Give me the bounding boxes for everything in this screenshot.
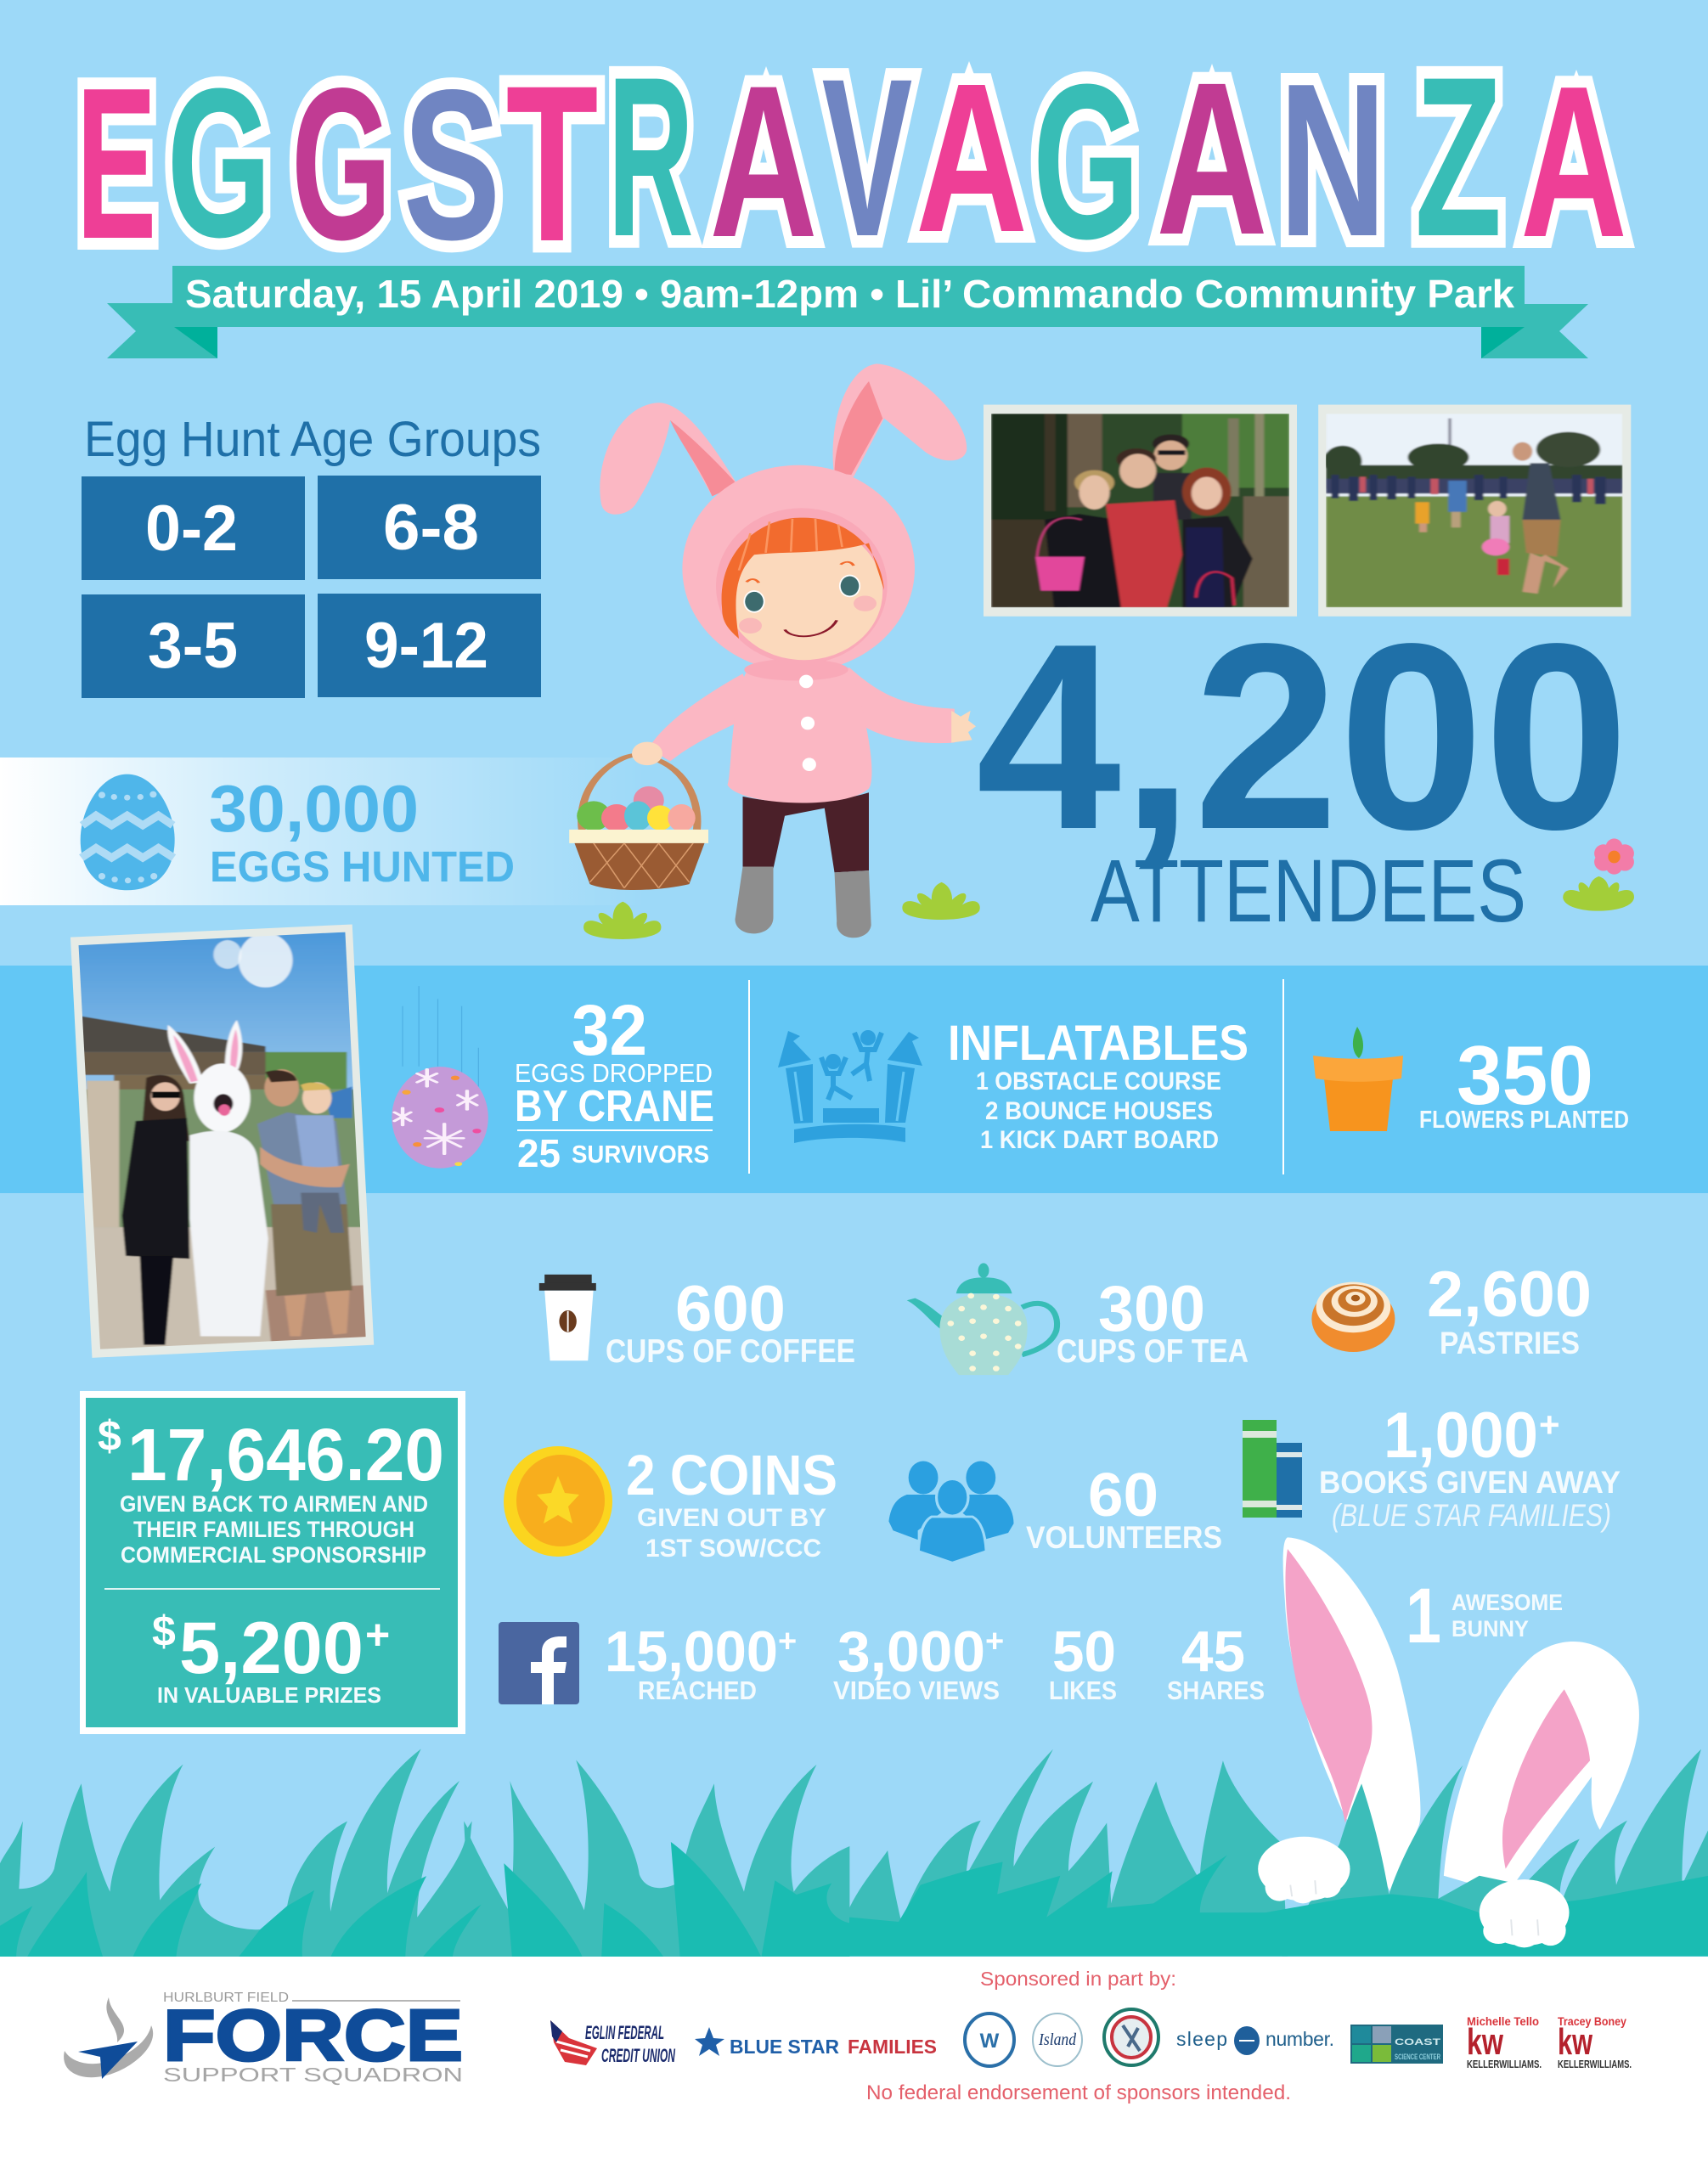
heading: egg hunt age groups: Egg Hunt Age Groups bbox=[84, 412, 541, 467]
stat: 1 awesome bunny: 1 bbox=[1406, 1573, 1441, 1659]
icon: flower and grass tuft bbox=[1563, 838, 1634, 911]
logo: Emerald Coast Science Center bbox=[1350, 2025, 1443, 2064]
stat: facebook reach figures bbox=[605, 1619, 1265, 1705]
logo: Keller Williams, Tracey Boney: Tracey Boney bbox=[1558, 2014, 1626, 2028]
divider left bbox=[748, 980, 750, 1174]
title: Eggstravaganza bbox=[76, 30, 1627, 288]
stat: 1,000+ books given away: BOOKS GIVEN AWAY bbox=[1319, 1465, 1621, 1500]
stat: facebook reach figures: LIKES bbox=[1049, 1676, 1117, 1705]
icon: cinnamon roll bbox=[1311, 1282, 1395, 1352]
logo: Keller Williams, Tracey Boney: kw bbox=[1558, 2021, 1593, 2063]
logo: Sleep Number: number. bbox=[1265, 2028, 1334, 2050]
icon: bounce house bbox=[778, 1030, 922, 1143]
photo: four children with baskets bbox=[984, 405, 1297, 617]
sponsor heading: Sponsored in part by: bbox=[980, 1968, 1176, 1990]
stat: 1 awesome bunny: AWESOME bbox=[1452, 1590, 1563, 1615]
panel: money given back: COMMERCIAL SPONSORSHIP bbox=[121, 1542, 426, 1568]
icon: flower pot bbox=[1313, 1027, 1403, 1131]
stat: 2 coins given out: GIVEN OUT BY bbox=[637, 1504, 826, 1532]
stat: 2 coins given out: 1ST SOW/CCC bbox=[645, 1535, 821, 1563]
stat: 350 flowers planted bbox=[1419, 1028, 1629, 1134]
logo: Blue Star Families: FAMILIES bbox=[848, 2036, 937, 2058]
stat: 32 eggs dropped by crane, 25 survivors bbox=[515, 990, 714, 1175]
panel: money given back bbox=[80, 1391, 465, 1734]
logo: Hurlburt Field Force Support Squadron: SUPPORT SQUADRON bbox=[163, 2064, 463, 2086]
stat: facebook reach figures: + bbox=[985, 1624, 1004, 1659]
fading white band behind eggs hunted bbox=[0, 758, 645, 905]
logo: Eglin Federal Credit Union: CREDIT UNION bbox=[601, 2045, 676, 2066]
title: Eggstravaganza: A bbox=[1520, 42, 1627, 283]
icon: falling decorated egg bbox=[392, 986, 488, 1169]
icon: facebook bbox=[499, 1622, 579, 1704]
stat: 60 volunteers bbox=[1026, 1462, 1222, 1555]
logo: Blue Star Families: BLUE STAR bbox=[730, 2036, 839, 2058]
stat: facebook reach figures: 50 bbox=[1052, 1619, 1116, 1684]
stat: 300 cups of tea: CUPS OF TEA bbox=[1057, 1333, 1249, 1370]
logo: round sponsor seals bbox=[965, 2009, 1158, 2066]
icon: stacked books bbox=[1243, 1420, 1302, 1518]
logo: Keller Williams, Michelle Tello: KELLERWILLIAMS. bbox=[1467, 2058, 1542, 2070]
stat: 32 eggs dropped by crane, 25 survivors: BY CRANE bbox=[515, 1082, 714, 1131]
stat: 1,000+ books given away: + bbox=[1539, 1405, 1560, 1445]
logo: Sleep Number: sleep bbox=[1176, 2028, 1227, 2050]
title: Eggstravaganza: G bbox=[167, 45, 271, 282]
stat: 30,000 eggs hunted: 30,000 bbox=[209, 771, 419, 846]
panel: money given back: 17,646.20 bbox=[127, 1414, 444, 1496]
stat: facebook reach figures: REACHED bbox=[638, 1676, 757, 1705]
panel: money given back: THEIR FAMILIES THROUGH bbox=[133, 1517, 414, 1542]
title: Eggstravaganza: T bbox=[506, 40, 598, 288]
stat: 4,200 attendees: ATTENDEES bbox=[1091, 842, 1526, 941]
divider right bbox=[1282, 979, 1284, 1174]
icon: volunteers group bbox=[888, 1461, 1014, 1563]
stat: 2,600 pastries: PASTRIES bbox=[1440, 1326, 1580, 1360]
title: Eggstravaganza: A bbox=[709, 42, 818, 283]
stat: 2 coins given out bbox=[626, 1444, 837, 1563]
logo: Keller Williams, Tracey Boney: KELLERWILLIAMS. bbox=[1558, 2058, 1632, 2070]
ribbon banner: date, time and place: Saturday, 15 April 2019 • 9am-12pm • Lil’ Commando Community Park bbox=[185, 272, 1514, 316]
stat: inflatables list: 1 KICK DART BOARD bbox=[980, 1126, 1219, 1154]
logo: Keller Williams, Michelle Tello: Michelle Tello bbox=[1467, 2014, 1539, 2028]
icon: gold coin with star bbox=[504, 1446, 612, 1557]
stat: 32 eggs dropped by crane, 25 survivors: 32 bbox=[572, 990, 647, 1070]
stat: 1 awesome bunny: BUNNY bbox=[1452, 1616, 1529, 1642]
stat: 600 cups of coffee bbox=[606, 1273, 855, 1370]
stat: 60 volunteers: 60 bbox=[1088, 1462, 1158, 1529]
stat: inflatables list: INFLATABLES bbox=[948, 1016, 1249, 1071]
age group boxes bbox=[82, 476, 541, 698]
stat: 350 flowers planted: FLOWERS PLANTED bbox=[1419, 1107, 1629, 1134]
stat: 350 flowers planted: 350 bbox=[1457, 1028, 1593, 1122]
stat: 600 cups of coffee: CUPS OF COFFEE bbox=[606, 1333, 855, 1370]
logo: Sleep Number bbox=[1176, 2026, 1334, 2055]
panel: money given back: IN VALUABLE PRIZES bbox=[157, 1682, 381, 1708]
logo: Blue Star Families bbox=[695, 2027, 937, 2058]
icon: coffee cup bbox=[539, 1275, 596, 1360]
stat: facebook reach figures: VIDEO VIEWS bbox=[833, 1676, 1000, 1705]
illustration: child in bunny suit with basket bbox=[569, 363, 980, 939]
title: Eggstravaganza: A bbox=[1156, 37, 1268, 280]
stat: 1 awesome bunny bbox=[1406, 1573, 1563, 1659]
stat: 4,200 attendees: 4,200 bbox=[976, 589, 1629, 885]
logo: Hurlburt Field Force Support Squadron bbox=[64, 1991, 463, 2086]
title: Eggstravaganza: Z bbox=[1415, 31, 1502, 284]
logo: Keller Williams, Michelle Tello bbox=[1467, 2014, 1542, 2070]
footer background bbox=[0, 1957, 1708, 2174]
stat: 30,000 eggs hunted: EGGS HUNTED bbox=[210, 842, 515, 891]
stat: 60 volunteers: VOLUNTEERS bbox=[1026, 1520, 1222, 1555]
stat: inflatables list bbox=[948, 1016, 1249, 1154]
logo: Hurlburt Field Force Support Squadron: HURLBURT FIELD bbox=[163, 1991, 289, 2005]
grass right bbox=[849, 1749, 1708, 1957]
title: Eggstravaganza: E bbox=[76, 42, 156, 284]
stat: 2 coins given out: 2 COINS bbox=[626, 1444, 837, 1507]
panel: money given back: $ bbox=[152, 1608, 176, 1655]
stat: inflatables list: 1 OBSTACLE COURSE bbox=[976, 1067, 1221, 1095]
disclaimer: No federal endorsement of sponsors intended. bbox=[866, 2081, 1291, 2104]
stat: 2,600 pastries: 2,600 bbox=[1427, 1259, 1592, 1331]
stat: facebook reach figures: SHARES bbox=[1167, 1676, 1265, 1705]
title: Eggstravaganza: A bbox=[916, 40, 1028, 277]
illustration: bunny paws bbox=[1258, 1837, 1570, 1947]
logo: Hurlburt Field Force Support Squadron: FORCE bbox=[163, 1996, 463, 2076]
stat: 1,000+ books given away bbox=[1319, 1400, 1621, 1533]
logo: Eglin Federal Credit Union bbox=[550, 2020, 676, 2066]
logo: round sponsor seals: Island bbox=[1038, 2030, 1077, 2049]
ribbon banner: date, time and place bbox=[107, 266, 1588, 358]
stat: inflatables list: 2 BOUNCE HOUSES bbox=[985, 1097, 1213, 1125]
logo: Keller Williams, Tracey Boney bbox=[1558, 2014, 1632, 2070]
age group boxes: 6-8 bbox=[383, 492, 479, 564]
age group boxes: 3-5 bbox=[148, 610, 238, 682]
stat: 1,000+ books given away: 1,000 bbox=[1384, 1400, 1538, 1472]
stat: 300 cups of tea: 300 bbox=[1098, 1273, 1205, 1345]
photo: family with the Easter bunny bbox=[70, 924, 374, 1358]
stat: facebook reach figures: 3,000 bbox=[837, 1619, 985, 1684]
stat: facebook reach figures: 45 bbox=[1181, 1619, 1245, 1684]
title: Eggstravaganza: S bbox=[403, 45, 500, 284]
stat: 32 eggs dropped by crane, 25 survivors: EGGS DROPPED bbox=[515, 1058, 713, 1088]
icon: blue decorated egg bbox=[81, 774, 175, 890]
stat: facebook reach figures: 15,000 bbox=[605, 1619, 778, 1684]
age group boxes: 9-12 bbox=[364, 610, 488, 682]
panel: money given back: $ bbox=[98, 1412, 121, 1460]
panel: money given back: + bbox=[365, 1611, 390, 1659]
grass left bbox=[0, 1749, 849, 1957]
stat: 600 cups of coffee: 600 bbox=[675, 1273, 786, 1345]
title: Eggstravaganza: V bbox=[822, 33, 912, 284]
logo: round sponsor seals: W bbox=[980, 2030, 1000, 2053]
logo: Emerald Coast Science Center: SCIENCE CENTER bbox=[1395, 2053, 1440, 2061]
logo: Eglin Federal Credit Union: EGLIN FEDERAL bbox=[585, 2022, 664, 2043]
photo: crowd hunting eggs on a field bbox=[1318, 405, 1631, 617]
logo: Emerald Coast Science Center: COAST bbox=[1395, 2037, 1440, 2047]
activities band bbox=[0, 966, 1708, 1193]
illustration: big bunny ears bbox=[1283, 1537, 1639, 1894]
stat: 2,600 pastries bbox=[1427, 1259, 1592, 1360]
panel: money given back: 5,200 bbox=[179, 1608, 364, 1689]
stat: 1,000+ books given away: (BLUE STAR FAMILIES) bbox=[1332, 1498, 1611, 1533]
stat: 32 eggs dropped by crane, 25 survivors: 25 bbox=[517, 1131, 561, 1175]
stat: 300 cups of tea bbox=[1057, 1273, 1249, 1370]
panel: money given back: GIVEN BACK TO AIRMEN AND bbox=[120, 1491, 428, 1517]
title: Eggstravaganza: G bbox=[291, 43, 392, 285]
stat: 30,000 eggs hunted bbox=[209, 771, 515, 891]
title: Eggstravaganza: N bbox=[1279, 37, 1386, 282]
stat: facebook reach figures: + bbox=[778, 1624, 797, 1659]
icon: polka dot teapot bbox=[907, 1263, 1057, 1375]
stat: 32 eggs dropped by crane, 25 survivors: SURVIVORS bbox=[572, 1141, 709, 1169]
logo: Keller Williams, Michelle Tello: kw bbox=[1467, 2021, 1504, 2063]
age group boxes: 0-2 bbox=[145, 493, 238, 565]
title: Eggstravaganza: R bbox=[607, 30, 694, 284]
title: Eggstravaganza: G bbox=[1033, 38, 1140, 284]
